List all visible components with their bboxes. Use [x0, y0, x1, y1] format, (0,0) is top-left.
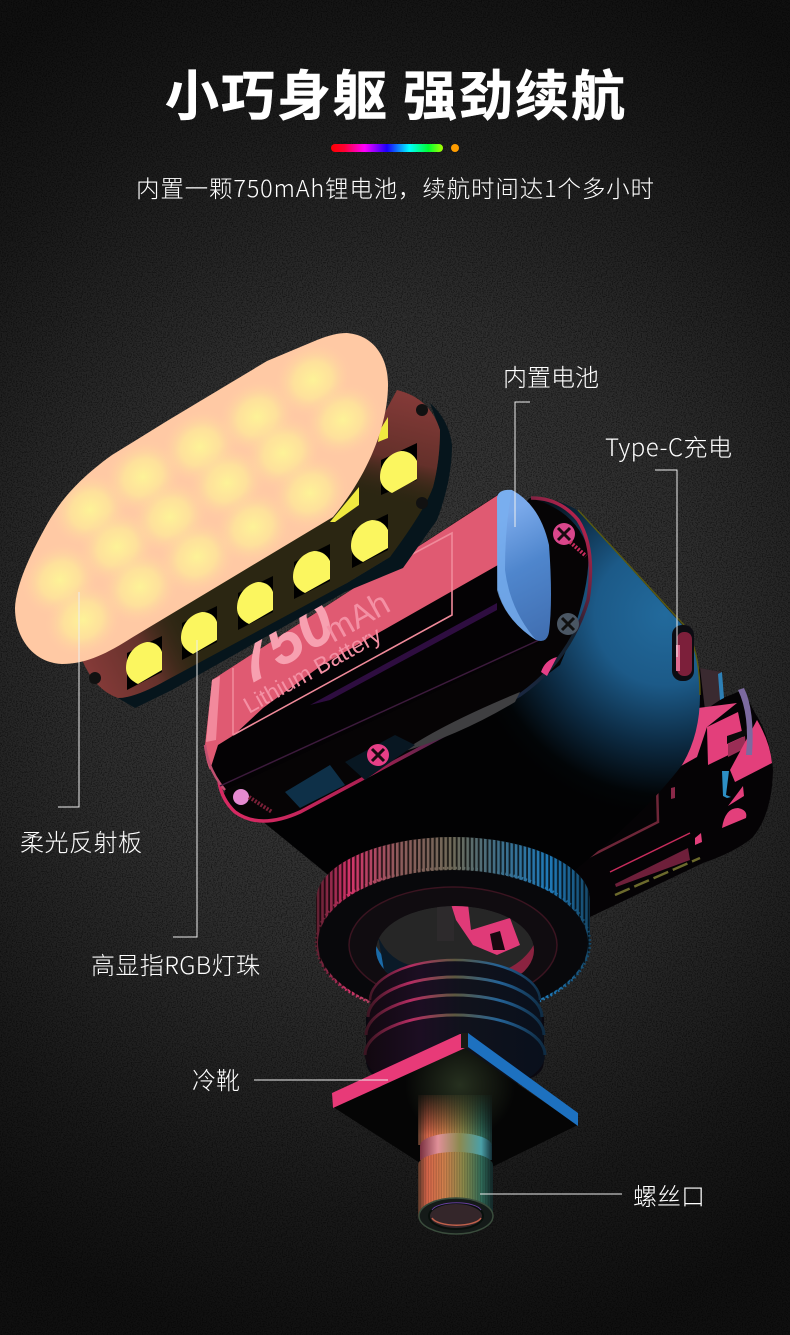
- rear control module: [558, 668, 773, 917]
- battery: [205, 490, 551, 790]
- callout: built-in battery: [503, 358, 599, 527]
- front rim: [219, 498, 590, 821]
- rainbow divider: [331, 144, 459, 152]
- screw: lower left: [233, 789, 272, 812]
- battery level ticks: [558, 797, 636, 841]
- battery capacity text: Lithium Battery: [239, 621, 386, 718]
- screw: partial lower right: [541, 657, 557, 676]
- callout: screw port: 螺丝口: [633, 1177, 705, 1212]
- subtitle: 内置一颗750mAh锂电池，续航时间达1个多小时: [136, 170, 654, 204]
- callout: Type-C charging: [605, 428, 732, 657]
- knurled ring: [316, 837, 590, 1018]
- battery capacity text: [222, 584, 396, 718]
- battery level ticks: 70: [558, 825, 574, 841]
- stacked disc adapter: [365, 960, 545, 1095]
- title: 小巧身躯 强劲续航: [165, 52, 625, 131]
- LED panel: [82, 390, 452, 708]
- type-c port: [672, 625, 694, 681]
- ring opening: [376, 906, 534, 974]
- battery cell cap: [497, 490, 551, 641]
- callout: soft reflector: 柔光反射板: [20, 823, 142, 858]
- callout: high CRI RGB LEDs: [91, 640, 260, 981]
- callout: Type-C charging: Type-C充电: [605, 428, 732, 463]
- threaded screw mount: [418, 1095, 493, 1234]
- screw: bottom centre: [367, 744, 389, 766]
- soft light reflector diffuser: [7, 328, 396, 672]
- callout: cold shoe: 冷靴: [192, 1061, 240, 1096]
- screw: top right: [553, 523, 586, 556]
- callout: soft reflector: [20, 592, 142, 858]
- threaded opening: [419, 1198, 493, 1234]
- battery capacity text: mAh: [318, 584, 396, 649]
- internal parts: [402, 692, 520, 752]
- diffused LED glows: [32, 354, 371, 646]
- main body shell: [218, 498, 700, 882]
- cold shoe plate: [332, 1033, 578, 1167]
- callout: high CRI RGB LEDs: 高显指RGB灯珠: [91, 946, 260, 981]
- battery label outline: [233, 533, 452, 735]
- LED row: [126, 417, 417, 690]
- screw: right grey: [557, 613, 579, 635]
- callout: built-in battery: 内置电池: [503, 358, 599, 393]
- battery capacity text: 750: [222, 587, 346, 697]
- compartment interior: [222, 498, 588, 821]
